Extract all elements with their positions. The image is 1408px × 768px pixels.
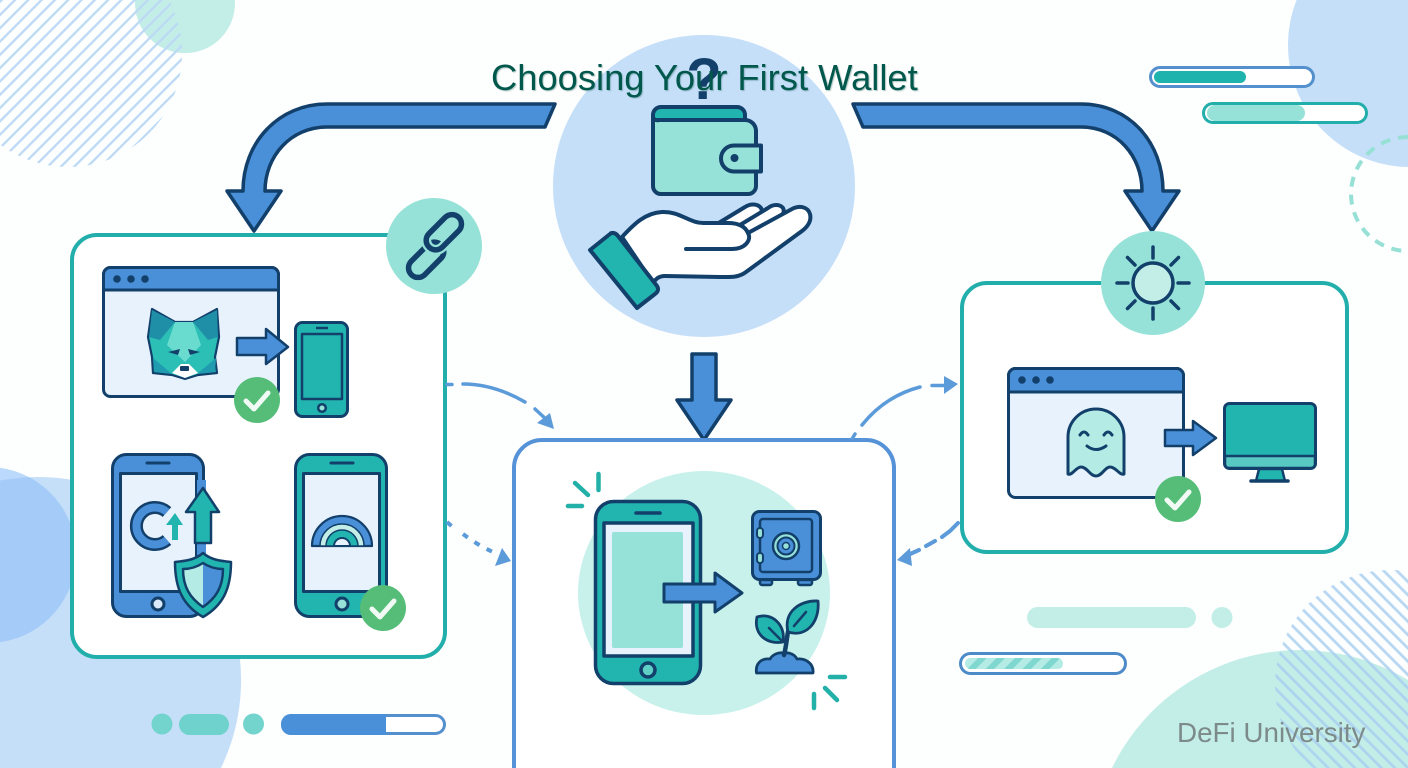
- icon: open hand: [590, 204, 810, 308]
- arrow: browser to desktop: [1165, 421, 1216, 455]
- icon: teal phone with rainbow: [296, 454, 386, 616]
- footer brand text: DeFi University: [1177, 717, 1366, 748]
- arrow: dotted right panel to bottom panel: [897, 523, 958, 566]
- panel frame: [514, 440, 894, 768]
- arrow: hub to right panel: [853, 104, 1179, 231]
- icon: desktop monitor: [1224, 404, 1316, 481]
- arrow: phone to safe and plant: [664, 573, 742, 612]
- icon: check badge: [234, 377, 280, 423]
- panel frame: [962, 283, 1347, 552]
- icon: small phone: [296, 322, 348, 416]
- hub circle: [553, 35, 855, 337]
- progress bar: striped: [960, 654, 1126, 674]
- icon: question mark: ?: [686, 47, 722, 112]
- browser window: fox wallet: [104, 268, 278, 396]
- progress bar: top teal: [1150, 68, 1314, 86]
- browser window: ghost wallet: [1008, 368, 1184, 498]
- icon: sun badge: [1101, 231, 1205, 335]
- title: Choosing Your First Wallet: [491, 57, 918, 98]
- icon: check badge: [1155, 476, 1201, 522]
- arrow: dotted left panel to bottom panel: [447, 522, 511, 566]
- progress bar: second mint: [1204, 104, 1366, 122]
- backdrop circle: [578, 471, 830, 715]
- icon: fox head: [148, 309, 219, 379]
- sparks: bottom right: [814, 677, 845, 708]
- sparks: top left: [568, 474, 598, 506]
- icon: link badge: [386, 198, 482, 294]
- center hub: wallet in hand: [553, 35, 855, 337]
- icon: safe: [752, 512, 820, 585]
- panel: left wallets: [72, 198, 482, 657]
- arrow: hub down to bottom panel: [677, 354, 731, 440]
- icon: large phone: [596, 502, 700, 684]
- icon: wallet: [653, 107, 761, 194]
- decorative pill and dot: right: [1027, 607, 1232, 628]
- arrow: hub to left panel: [227, 104, 555, 231]
- arrow: dashed left panel to bottom panel: [447, 384, 554, 429]
- icon: blue phone with ring and shield: [112, 454, 231, 617]
- panel: bottom center next steps: [514, 440, 894, 768]
- arrow: browser to phone: [237, 329, 288, 364]
- icon: ghost: [1068, 409, 1124, 476]
- decorative pills and progress bar: bottom left: [152, 714, 444, 735]
- panel frame: [72, 235, 445, 657]
- icon: plant sprout: [756, 601, 818, 673]
- icon: check badge: [360, 585, 406, 631]
- arrow: dashed bottom panel to right panel: [852, 376, 958, 439]
- panel: right wallet: [962, 231, 1347, 552]
